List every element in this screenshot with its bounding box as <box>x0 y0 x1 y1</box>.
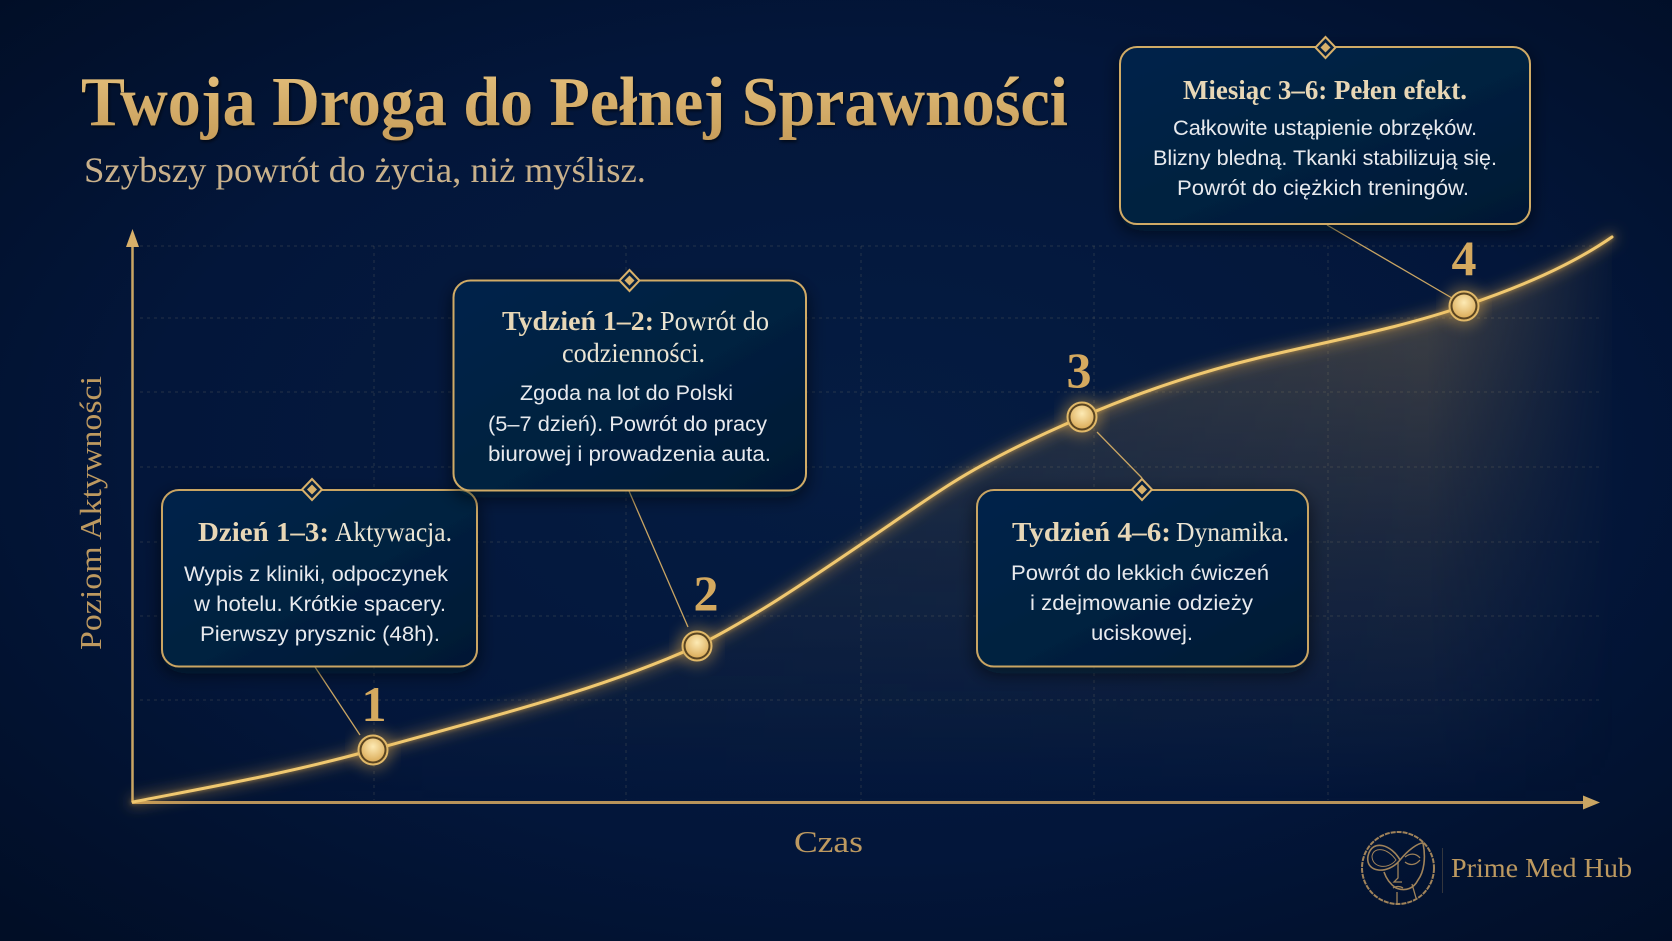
body text 1: Pierwszy prysznic (48h). <box>200 623 440 646</box>
x axis <box>132 796 1600 810</box>
panel: Dzień 1-3 <box>162 479 477 666</box>
diamond ornament 1 <box>302 479 322 500</box>
milestone number 1: 1 <box>362 676 386 732</box>
connector lines <box>315 225 1452 735</box>
heading 3: Tydzień 4–6: <box>1012 517 1171 547</box>
heading 3 <box>1012 517 1289 547</box>
panel: Tydzień 4-6 <box>977 479 1308 666</box>
y axis label: Poziom Aktywności <box>73 376 108 650</box>
subtitle: Szybszy powrót do życia, niż myślisz. <box>84 150 646 190</box>
body text 4: Powrót do ciężkich treningów. <box>1177 177 1469 200</box>
heading 3: Dynamika. <box>1176 517 1289 547</box>
panel: Tydzień 1-2 <box>454 270 806 490</box>
body text 3: uciskowej. <box>1091 622 1193 645</box>
diamond ornament 3 <box>1132 479 1152 500</box>
milestone number 3: 3 <box>1066 342 1092 398</box>
body text 2: biurowej i prowadzenia auta. <box>488 443 771 466</box>
panel: Miesiąc 3-6 <box>1120 37 1530 224</box>
heading 4: Miesiąc 3–6: Pełen efekt. <box>1183 75 1467 105</box>
logo divider <box>1442 848 1444 893</box>
body text 3: Powrót do lekkich ćwiczeń <box>1011 562 1269 585</box>
title: Twoja Droga do Pełnej Sprawności <box>81 64 1068 141</box>
area under curve <box>726 255 1596 706</box>
heading 2 <box>502 306 769 368</box>
diamond ornament 2 <box>620 270 640 291</box>
milestone marker 3 <box>1062 397 1102 437</box>
heading 1: Dzień 1–3: <box>198 517 329 547</box>
body text 1 <box>184 563 449 646</box>
body text 4: Blizny bledną. Tkanki stabilizują się. <box>1153 147 1497 170</box>
heading 2: Tydzień 1–2: <box>502 306 654 336</box>
milestone number 4: 4 <box>1452 230 1476 286</box>
milestone marker 4 <box>1444 286 1484 326</box>
milestone marker 2 <box>677 626 717 666</box>
chart grid <box>140 246 1600 800</box>
logo icon <box>1362 832 1434 904</box>
x axis label: Czas <box>794 824 863 859</box>
y axis <box>126 229 139 802</box>
body text 4: Całkowite ustąpienie obrzęków. <box>1173 117 1477 140</box>
progress curve <box>133 237 1612 802</box>
body text 1: w hotelu. Krótkie spacery. <box>193 593 446 616</box>
heading 2: codzienności. <box>562 338 705 368</box>
logo text: Prime Med Hub <box>1451 853 1632 883</box>
body text 4 <box>1153 117 1497 200</box>
body text 2 <box>488 382 771 466</box>
body text 2: (5–7 dzień). Powrót do pracy <box>488 413 768 436</box>
body text 3: i zdejmowanie odzieży <box>1030 592 1254 615</box>
milestone marker 1 <box>353 730 393 770</box>
body text 1: Wypis z kliniki, odpoczynek <box>184 563 449 586</box>
heading 2: Powrót do <box>660 306 769 336</box>
heading 1: Aktywacja. <box>335 517 452 547</box>
body text 3 <box>1011 562 1269 645</box>
body text 2: Zgoda na lot do Polski <box>520 382 733 405</box>
milestone number 2: 2 <box>694 565 718 621</box>
diamond ornament 4 <box>1316 37 1336 58</box>
heading 1 <box>198 517 452 547</box>
